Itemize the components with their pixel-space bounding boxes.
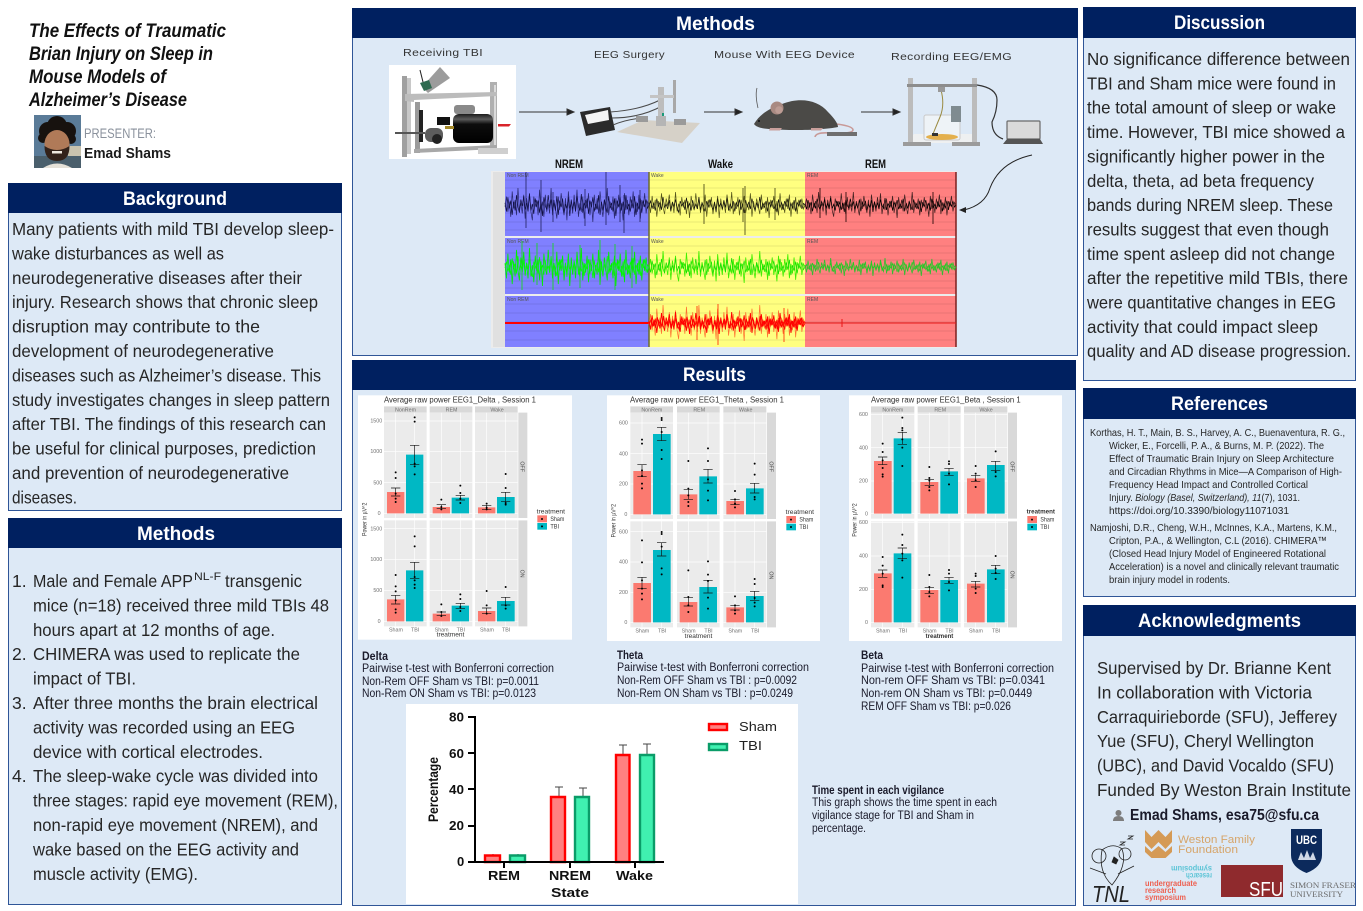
text block: discussion: No significance difference between: [1087, 49, 1350, 69]
chart: delta power: Sham: [550, 516, 565, 523]
contact: Emad Shams, esa75@sfu.ca: [1130, 807, 1319, 824]
caption: beta: [861, 650, 1054, 713]
chart: delta power: Sham: [480, 627, 494, 633]
text block: background: Many patients with mild TBI develop sleep-: [12, 219, 334, 239]
chart: theta power: [607, 395, 820, 641]
logo: SFU: [1221, 865, 1356, 901]
text block: references: [1090, 427, 1345, 586]
text block: references: Namjoshi, D.R., Cheng, W.H., McInnes, K.A., Martens, K.M.,: [1090, 522, 1337, 534]
chart: delta power: Wake: [490, 407, 504, 413]
chart: theta power: NonRem: [641, 407, 663, 413]
text block: references: Cripton, P.A., & Wellington, C.L (2016). CHIMERA™: [1109, 535, 1327, 547]
chart: delta power: 1000: [370, 449, 382, 455]
chart: theta power: 0: [624, 512, 627, 518]
chart: beta power: TBI: [945, 628, 954, 634]
caption: beta: Non-rem OFF Sham vs TBI: p=0.0341: [861, 675, 1045, 687]
chart: theta power: 600: [619, 421, 628, 427]
logo: undergraduate research symposium: symposium: [1145, 893, 1186, 902]
chart: delta power: TBI: [457, 627, 465, 633]
chart: delta power: 1500: [370, 526, 382, 532]
chart: theta power: 600: [619, 529, 628, 535]
text block: discussion: the total amount of sleep or wake: [1087, 98, 1336, 118]
presenter name: [84, 125, 171, 162]
logo: undergraduate research symposium: undergraduate: [1145, 879, 1198, 888]
text block: methods list: Male and Female APP: [33, 571, 193, 591]
chart: theta power: treatment: [786, 509, 814, 516]
chart: delta power: treatment: [537, 508, 565, 515]
chart: EEG and EMG traces: [491, 171, 957, 348]
chart: delta power: Sham: [435, 627, 449, 633]
chart: theta power: 0: [624, 620, 627, 626]
caption: beta: Beta: [861, 650, 884, 662]
heading: references: References: [1171, 394, 1268, 415]
text block: methods list: device with cortical electrodes.: [33, 742, 263, 762]
chart: time spent in each vigilance state: Wake: [616, 868, 653, 883]
text block: background: injury. Research shows that chronic sleep: [12, 292, 318, 312]
chart: beta power: TBI: [1040, 524, 1049, 531]
caption: theta: Non-Rem OFF Sham vs TBI : p=0.0092: [617, 675, 797, 687]
text block: discussion: bands during NREM sleep. These: [1087, 195, 1333, 215]
chart: delta power: OFF: [519, 461, 525, 473]
chart: beta power: 0: [865, 511, 868, 517]
chart: delta power: 0: [378, 619, 381, 625]
chart: theta power: Sham: [682, 628, 696, 634]
chart: beta power: ON: [1008, 571, 1014, 579]
stage labels: [555, 159, 886, 171]
presenter name: PRESENTER:: [84, 125, 156, 141]
caption: delta: [362, 651, 554, 700]
chart: theta power: Average raw power EEG1_Theta , Session 1: [630, 396, 785, 405]
caption: beta: REM OFF Sham vs TBI: p=0.026: [861, 701, 1011, 713]
chart: beta power: [849, 395, 1062, 641]
panel: methods diagram: [352, 8, 1078, 356]
text block: references: Injury. Biology (Basel, Switzerland), 11(7), 1031.: [1109, 492, 1300, 504]
chart: beta power: TBI: [992, 628, 1000, 634]
stage labels: NREM: [555, 159, 583, 171]
chart: beta power: OFF: [1008, 461, 1014, 473]
logo: undergraduate research symposium: research: [1145, 886, 1176, 895]
chart: beta power: 0: [865, 620, 868, 626]
chart: time spent in each vigilance state: 20: [449, 818, 464, 833]
logo: Weston Family Foundation: Foundation: [1178, 844, 1238, 856]
step labels: Mouse With EEG Device: [714, 49, 855, 61]
chart: EEG and EMG traces: Non REM: [507, 239, 529, 245]
caption: time spent: Time spent in each vigilance: [812, 785, 944, 797]
chart: delta power: 500: [373, 588, 382, 594]
chart: time spent in each vigilance state: 0: [457, 854, 464, 869]
heading: discussion: Discussion: [1174, 13, 1265, 34]
chart: time spent in each vigilance state: REM: [488, 868, 520, 883]
text block: discussion: delta, theta, ad beta frequency: [1087, 171, 1314, 191]
title: Mouse Models of: [29, 67, 167, 88]
chart: time spent in each vigilance state: State: [551, 885, 589, 900]
chart: theta power: TBI: [799, 524, 808, 531]
chart: theta power: 200: [619, 482, 628, 488]
text block: background: diseases such as Alzheimer’s disease. This: [12, 365, 321, 385]
chart: delta power: Power in µV^2: [361, 502, 368, 536]
heading: results: Results: [683, 365, 746, 386]
chart: EEG and EMG traces: Wake: [651, 239, 664, 245]
text block: acknowledgments: Carraquirieborde (SFU), Jefferey: [1097, 707, 1337, 727]
text block: discussion: time. However, TBI mice showed a: [1087, 122, 1345, 142]
logo: TNL mouse: [1090, 836, 1134, 907]
logo: undergraduate research symposium: symposium: [1171, 864, 1212, 873]
presenter name: Emad Shams: [84, 145, 171, 162]
chart: EEG and EMG traces: Wake: [651, 297, 664, 303]
illustration: EEG surgery: [580, 80, 700, 143]
icon: person: [1113, 810, 1124, 821]
step labels: [403, 47, 1012, 63]
chart: time spent in each vigilance state: Sham: [739, 719, 777, 734]
text block: discussion: significantly higher power in the: [1087, 146, 1325, 166]
chart: time spent in each vigilance state: 40: [449, 782, 464, 797]
caption: theta: Pairwise t-test with Bonferroni correction: [617, 662, 809, 674]
chart: theta power: Sham: [799, 517, 814, 524]
chart: time spent in each vigilance state: [406, 704, 798, 904]
chart: EEG and EMG traces: REM: [807, 239, 818, 245]
caption: delta: Non-Rem OFF Sham vs TBI: p=0.0011: [362, 676, 539, 688]
logo: UBC: UBC: [1296, 833, 1317, 847]
chart: beta power: treatment: [1027, 508, 1056, 515]
text block: background: be useful for clinical purposes, prediction: [12, 439, 316, 459]
stage labels: Wake: [708, 159, 733, 171]
arrow: curved to traces: [959, 155, 1032, 213]
text block: methods list: 3.: [12, 693, 27, 713]
logo: undergraduate research symposium: [1145, 864, 1212, 902]
chart: EEG and EMG traces: Non REM: [507, 173, 529, 179]
caption: beta: Pairwise t-test with Bonferroni correction: [861, 663, 1054, 675]
caption: delta: Delta: [362, 651, 389, 663]
chart: delta power: TBI: [550, 523, 559, 530]
heading: background: Background: [123, 189, 227, 210]
logo: SFU: SFU: [1249, 879, 1283, 901]
chart: delta power: 1000: [370, 557, 382, 563]
chart: beta power: Average raw power EEG1_Beta , Session 1: [871, 396, 1021, 405]
chart: delta power: 500: [373, 480, 382, 486]
text block: references: brain injury model in rodents.: [1109, 574, 1230, 586]
caption: time spent: percentage.: [812, 823, 866, 835]
chart: beta power: Sham: [876, 628, 890, 634]
chart: theta power: Sham: [635, 628, 650, 634]
chart: delta power: TBI: [411, 627, 419, 633]
chart: time spent in each vigilance state: NREM: [549, 868, 591, 883]
panel: background: [8, 183, 342, 510]
text block: methods list: NL-F: [194, 571, 221, 583]
chart: delta power: 0: [378, 511, 381, 517]
logo: undergraduate research symposium: research: [1186, 871, 1212, 880]
text block: methods list: transgenic: [225, 571, 302, 591]
logo: TNL mouse: TNL: [1092, 881, 1130, 907]
text block: methods list: mice (n=18) received three mild TBIs 48: [33, 595, 329, 615]
step labels: Recording EEG/EMG: [891, 51, 1012, 63]
text block: methods list: 4.: [12, 766, 27, 786]
chart: beta power: 600: [859, 412, 868, 418]
text block: methods list: non-rapid eye movement (NREM), and: [33, 815, 318, 835]
presenter photo: [34, 115, 81, 168]
text block: references: Wicker, E., Forcelli, P. A., & Burns, M. P. (2022). The: [1109, 440, 1324, 452]
chart: delta power: NonRem: [395, 407, 417, 413]
panel: results: [352, 360, 1076, 906]
panel: acknowledgments: [1083, 605, 1356, 907]
chart: EEG and EMG traces: REM: [807, 297, 818, 303]
heading: methods list: Methods: [137, 524, 215, 545]
text block: background: neurodegenerative diseases after their: [12, 268, 302, 288]
heading: methods diagram: Methods: [676, 14, 755, 35]
text block: acknowledgments: Supervised by Dr. Brianne Kent: [1097, 658, 1331, 678]
chart: theta power: TBI: [658, 628, 666, 634]
text block: acknowledgments: In collaboration with Victoria: [1097, 682, 1312, 702]
text block: methods list: 1.: [12, 571, 27, 591]
text block: references: Effect of Traumatic Brain Injury on Sleep Architecture: [1109, 453, 1334, 465]
chart: delta power: ON: [519, 570, 525, 578]
illustration: mouse with EEG device: [754, 88, 857, 137]
text block: references: https://doi.org/10.3390/biology11071031: [1109, 505, 1289, 517]
chart: theta power: 200: [619, 590, 628, 596]
step labels: EEG Surgery: [594, 49, 665, 61]
chart: EEG and EMG traces: REM: [807, 173, 818, 179]
caption: theta: [617, 650, 809, 700]
text block: methods list: The sleep-wake cycle was divided into: [33, 766, 318, 786]
text block: methods list: impact of TBI.: [33, 669, 136, 689]
chart: beta power: Power in µV^2: [851, 503, 858, 537]
text block: discussion: time spent asleep did not change: [1087, 244, 1335, 264]
chart: beta power: Sham: [923, 628, 937, 634]
chart: theta power: Wake: [739, 407, 752, 413]
chart: theta power: Power in µV^2: [611, 504, 618, 537]
text block: acknowledgments: [1097, 658, 1351, 800]
chart: beta power: treatment: [926, 633, 954, 640]
text block: discussion: results suggest that even though: [1087, 220, 1329, 240]
caption: time spent: This graph shows the time spent in each: [812, 797, 997, 809]
title: Alzheimer’s Disease: [28, 90, 187, 111]
chart: delta power: 1500: [370, 419, 382, 425]
caption: time spent: [812, 785, 997, 835]
heading: acknowledgments: Acknowledgments: [1138, 611, 1301, 632]
text block: acknowledgments: Yue (SFU), Cheryl Wellington: [1097, 731, 1314, 751]
chart: theta power: 400: [619, 451, 628, 457]
chart: theta power: TBI: [751, 628, 759, 634]
chart: beta power: 200: [859, 587, 868, 593]
panel: references: [1083, 388, 1356, 596]
text block: methods list: After three months the brain electrical: [33, 693, 318, 713]
caption: time spent: vigilance stage for TBI and Sham in: [812, 810, 974, 822]
chart: beta power: 200: [859, 479, 868, 485]
chart: theta power: TBI: [704, 628, 713, 634]
caption: delta: Non-Rem ON Sham vs TBI: p=0.0123: [362, 688, 536, 700]
chart: beta power: 600: [859, 520, 868, 526]
chart: beta power: Sham: [969, 628, 983, 634]
text block: methods list: hours apart at 12 months of age.: [33, 620, 275, 640]
chart: EEG and EMG traces: Non REM: [507, 297, 529, 303]
caption: theta: Non-Rem ON Sham vs TBI : p=0.0249: [617, 688, 793, 700]
text block: background: after TBI. The findings of this research can: [12, 414, 326, 434]
text block: background: and prevention of neurodegenerative: [12, 463, 289, 483]
text block: discussion: [1086, 49, 1351, 361]
logo: Weston Family Foundation: Weston Family: [1178, 834, 1256, 846]
logo: Weston Family Foundation: [1145, 830, 1256, 858]
text block: discussion: activity that could impact sleep: [1087, 317, 1318, 337]
text block: discussion: were quantitative changes in EEG: [1086, 292, 1336, 312]
text block: methods list: three stages: rapid eye movement (REM),: [33, 791, 338, 811]
chart: theta power: REM: [693, 407, 705, 413]
chart: delta power: Sham: [389, 627, 403, 633]
text block: methods list: CHIMERA was used to replicate the: [33, 644, 300, 664]
chart: beta power: 400: [859, 445, 868, 451]
text block: background: study investigates changes in sleep pattern: [12, 390, 330, 410]
chart: theta power: OFF: [767, 461, 773, 473]
text block: background: wake disturbances as well as: [11, 243, 224, 263]
chart: beta power: REM: [934, 407, 946, 413]
text block: methods list: activity was recorded using an EEG: [33, 717, 295, 737]
chart: time spent in each vigilance state: 80: [449, 710, 464, 724]
caption: beta: Non-rem ON Sham vs TBI: p=0.0449: [861, 688, 1032, 700]
text block: background: development of neurodegenerative: [12, 341, 274, 361]
chart: theta power: 400: [619, 560, 628, 566]
chart: delta power: Average raw power EEG1_Delta , Session 1: [384, 396, 537, 405]
chart: EEG and EMG traces: Wake: [651, 173, 664, 179]
text block: discussion: quality and AD disease progression.: [1087, 341, 1351, 361]
chart: beta power: Wake: [979, 407, 993, 413]
panel: discussion: [1083, 7, 1356, 380]
title: The Effects of Traumatic: [29, 21, 226, 42]
caption: theta: Theta: [617, 650, 644, 662]
text block: background: disruption may contribute to the: [12, 317, 260, 337]
text block: methods list: [12, 571, 338, 884]
caption: delta: Pairwise t-test with Bonferroni correction: [362, 663, 554, 675]
logo: SFU: UNIVERSITY: [1290, 889, 1343, 899]
arrow: TBI to surgery: [519, 109, 574, 115]
stage labels: REM: [865, 159, 886, 171]
chart: theta power: Sham: [728, 628, 743, 634]
title: [28, 21, 226, 111]
chart: time spent in each vigilance state: Percentage: [426, 757, 441, 822]
chart: beta power: TBI: [899, 628, 907, 634]
chart: delta power: REM: [446, 407, 458, 413]
logo: SFU: SIMON FRASER: [1290, 880, 1356, 890]
chart: delta power: TBI: [502, 627, 510, 633]
text block: discussion: after the repetitive mild TBIs, there: [1087, 268, 1348, 288]
text block: references: (Closed Head Injury Model of Engineered Rotational: [1109, 548, 1326, 560]
chart: beta power: Sham: [1040, 517, 1055, 524]
chart: delta power: treatment: [437, 632, 464, 639]
chart: delta power: [358, 395, 572, 640]
text block: references: Frequency Head Impact and Controlled Cortical: [1109, 479, 1308, 491]
chart: time spent in each vigilance state: TBI: [739, 738, 762, 753]
logo: UBC: [1291, 829, 1322, 873]
chart: beta power: 400: [859, 554, 868, 560]
panel: methods list: [8, 518, 342, 904]
text block: methods list: wake based on the EEG activity and: [32, 839, 299, 859]
chart: beta power: NonRem: [882, 407, 904, 413]
title: Brian Injury on Sleep in: [29, 44, 213, 65]
text block: background: diseases.: [12, 487, 77, 507]
chart: time spent in each vigilance state: 60: [449, 746, 464, 761]
chart: theta power: treatment: [685, 633, 712, 640]
step labels: Receiving TBI: [403, 47, 483, 59]
text block: methods list: muscle activity (EMG).: [33, 864, 198, 884]
text block: methods list: 2.: [12, 644, 27, 664]
text block: references: Acceleration) is a novel and clinically relevant traumatic: [1109, 561, 1339, 573]
chart: theta power: ON: [767, 571, 773, 579]
text block: background: [11, 219, 334, 507]
arrow: surgery to mouse: [704, 109, 742, 115]
text block: acknowledgments: Funded By Weston Brain Institute: [1097, 780, 1351, 800]
text block: references: and Circadian Rhythms in Mice—A Comparison of High-: [1109, 466, 1342, 478]
illustration: recording EEG/EMG: [903, 78, 1043, 146]
text block: acknowledgments: (UBC), and David Vocaldo (SFU): [1097, 756, 1334, 776]
text block: discussion: TBI and Sham mice were found in: [1087, 73, 1336, 93]
arrow: mouse to recording: [861, 109, 900, 115]
illustration: TBI device: [389, 65, 516, 159]
